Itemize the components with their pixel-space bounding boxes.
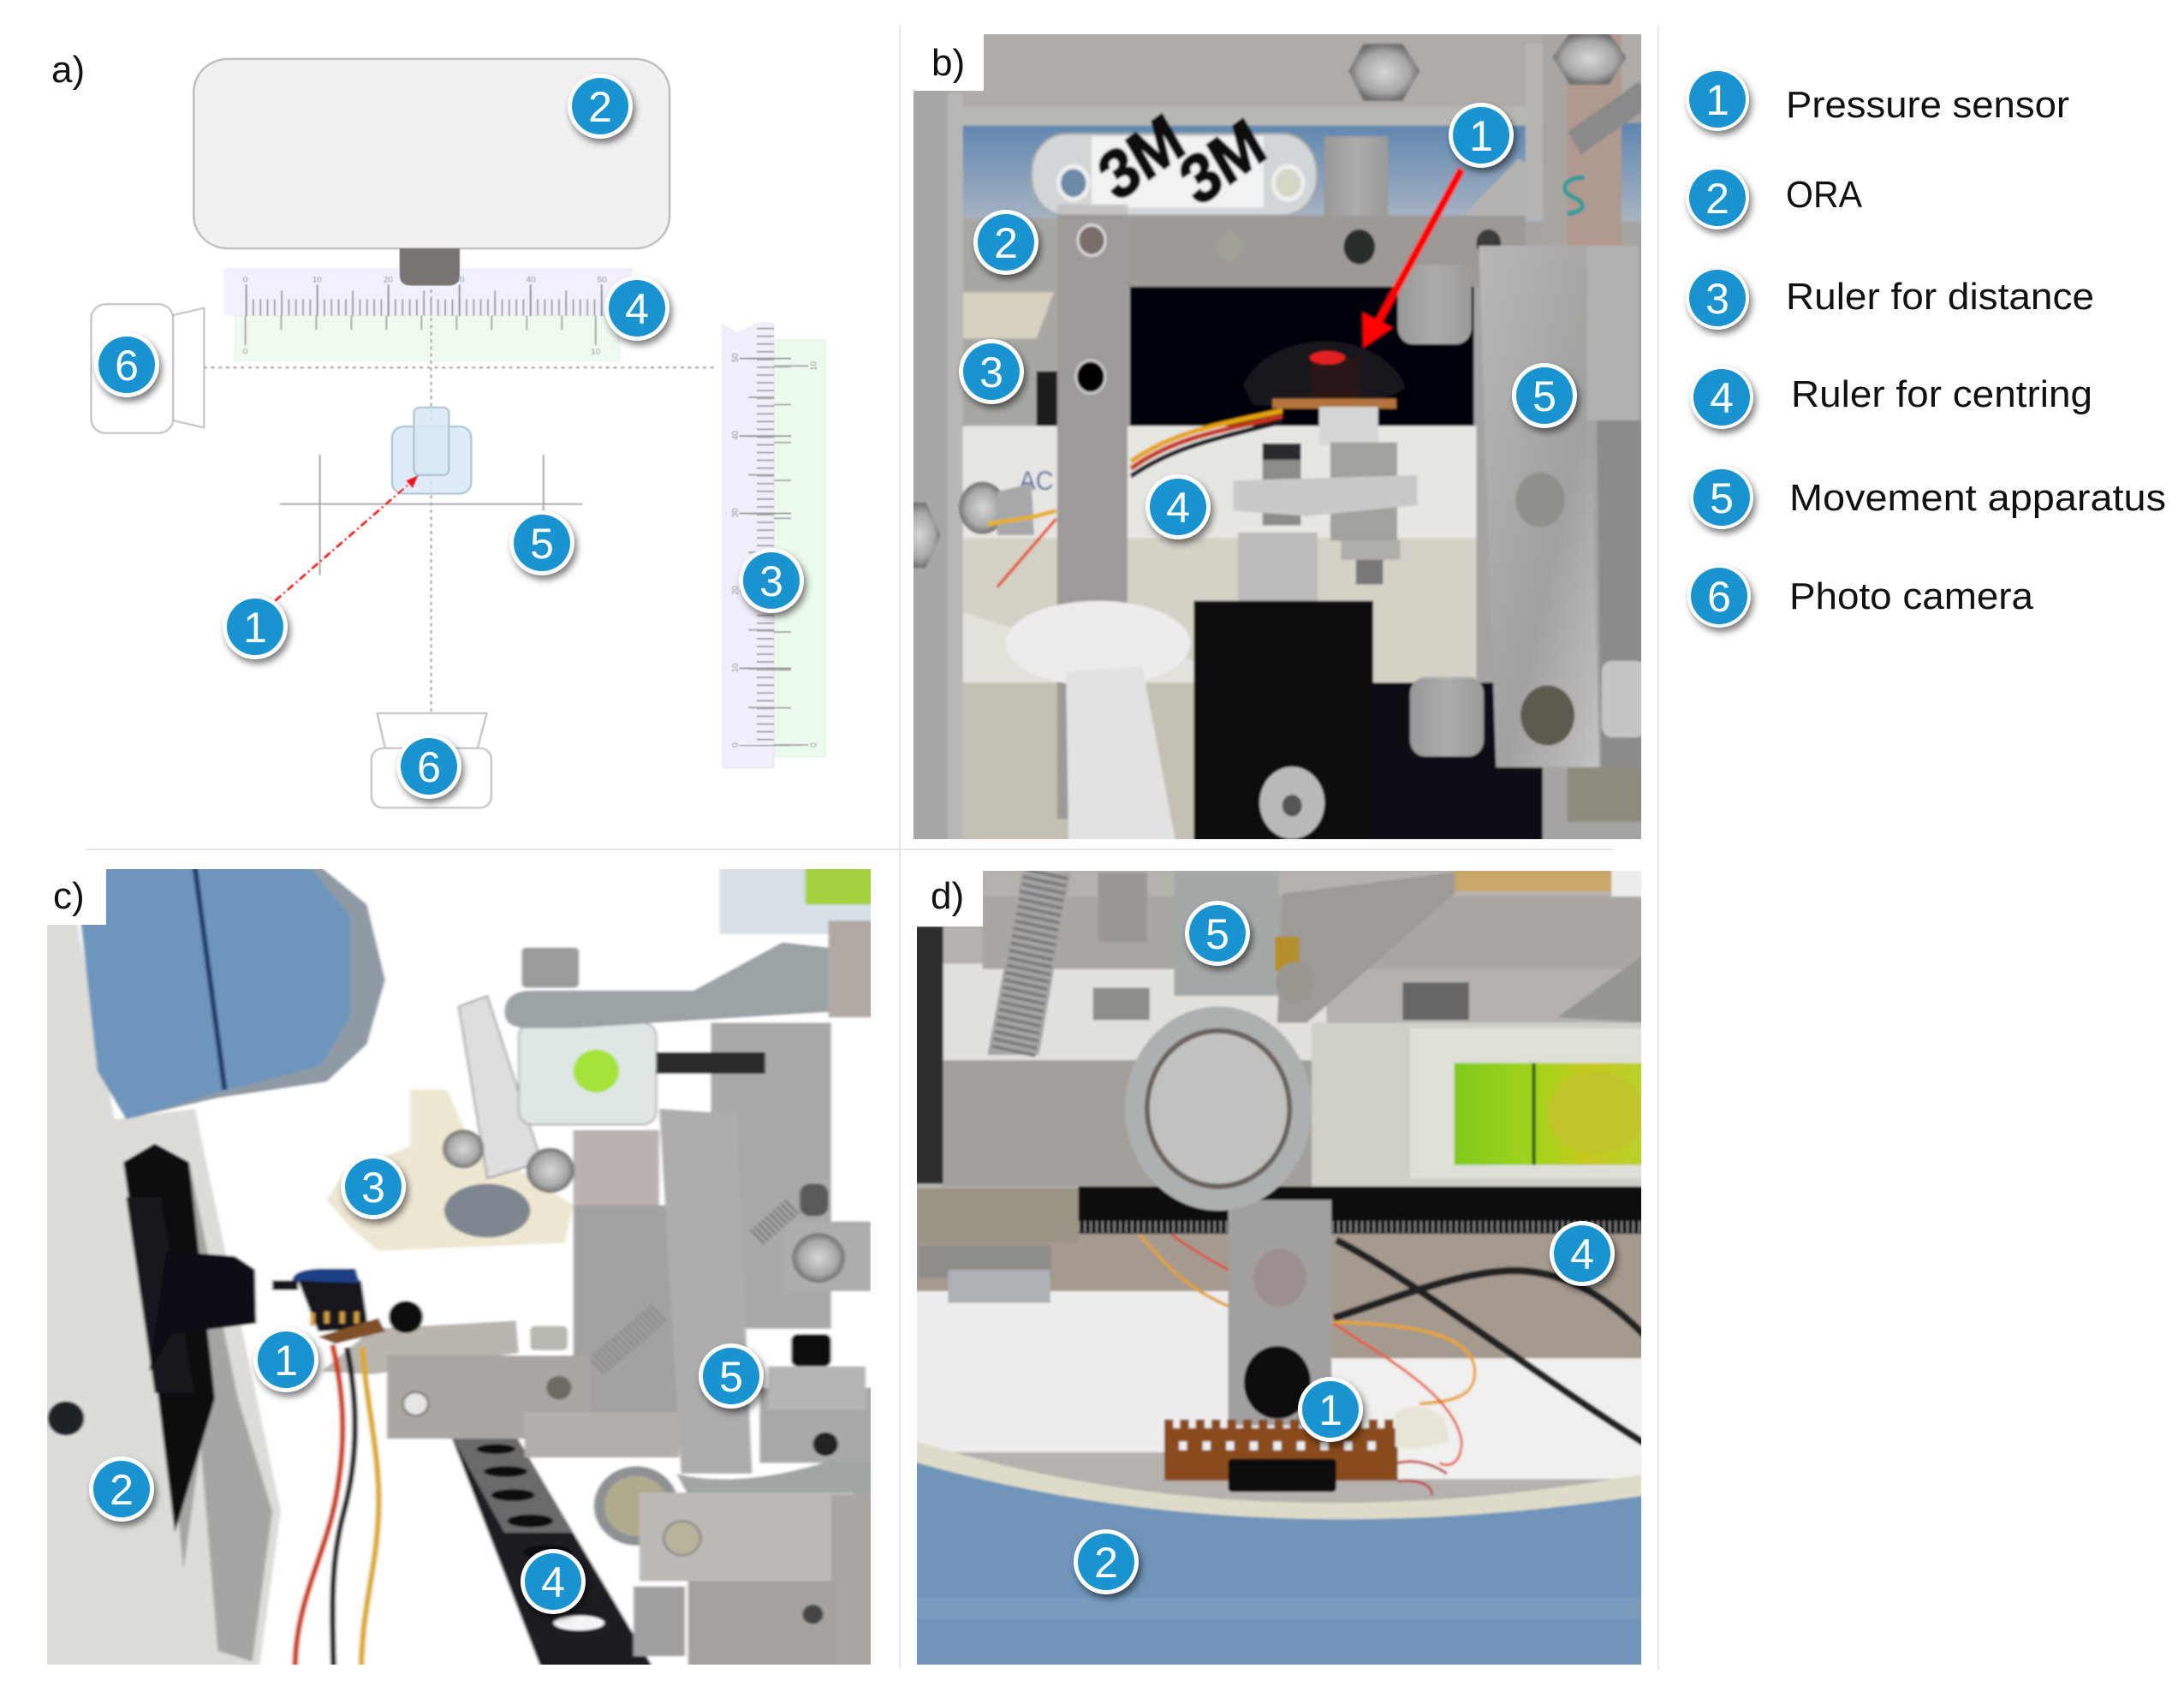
panel: d) close-up photograph [908, 861, 1651, 1672]
badge 4 [521, 1549, 586, 1614]
badge 3: 3 [979, 349, 1003, 396]
legend item 6: Photo camera [1687, 564, 2034, 628]
panel label a): a) [51, 49, 85, 91]
badge 5: 5 [530, 520, 554, 568]
badge 1: 1 [274, 1337, 298, 1385]
badge 4: 4 [625, 285, 649, 333]
legend item 4: Ruler for centring: Ruler for centring [1791, 373, 2092, 415]
badge 4: 4 [541, 1558, 565, 1606]
ruler for centring: 0 [243, 347, 248, 356]
legend item 6: Photo camera: Photo camera [1789, 575, 2034, 617]
ruler for distance: 30 [731, 508, 741, 517]
dashed alignment lines [92, 289, 714, 808]
legend item 5: Movement apparatus: 5 [1710, 474, 1734, 522]
ruler for distance: 0 [731, 742, 741, 748]
panel label b) [913, 34, 984, 91]
ruler for centring: 20 [384, 276, 393, 285]
legend item 1: Pressure sensor [1686, 68, 2069, 131]
ruler for distance: 10 [731, 663, 741, 672]
ORA device body [193, 59, 669, 248]
badge 3: 3 [361, 1164, 385, 1212]
badge 2: 2 [994, 219, 1018, 267]
badge 5: 5 [1205, 910, 1229, 958]
pressure sensor [392, 408, 471, 494]
legend item 3: Ruler for distance: 3 [1705, 275, 1729, 323]
badge 1: 1 [1318, 1386, 1342, 1434]
left photo camera [91, 304, 204, 433]
badge 1: 1 [1469, 112, 1493, 160]
badge 4 [1146, 474, 1211, 539]
legend item 5: Movement apparatus [1690, 466, 2166, 529]
badge 3 [739, 548, 804, 613]
ruler for distance: 40 [731, 430, 741, 440]
ruler for centring [223, 268, 634, 361]
ruler for centring: 0 [243, 276, 248, 285]
legend item 1: Pressure sensor: 1 [1705, 76, 1729, 124]
badge 4: 4 [1166, 484, 1190, 532]
ruler for centring: 40 [526, 276, 536, 285]
legend [1686, 68, 2166, 628]
legend item 5: Movement apparatus: Movement apparatus [1789, 477, 2166, 519]
badge 3: 3 [759, 557, 783, 605]
panel label c): c) [53, 875, 85, 917]
panel: b) front view photograph: 3M [1086, 100, 1196, 216]
movement apparatus [280, 455, 582, 575]
ruler for distance: 20 [731, 586, 741, 595]
badge 1 [1298, 1377, 1363, 1442]
legend item 3: Ruler for distance [1686, 266, 2094, 330]
bottom photo camera [372, 713, 491, 807]
panel label d) [917, 871, 983, 926]
number badges: panel a [94, 74, 804, 799]
badge 5: 5 [1532, 372, 1556, 420]
legend item 1: Pressure sensor: Pressure sensor [1786, 84, 2069, 126]
badge 5 [699, 1344, 764, 1409]
divider lines [86, 26, 1658, 1670]
badge 2: 2 [110, 1466, 134, 1514]
badge 1: 1 [243, 604, 267, 652]
panel: a) schematic diagram [51, 49, 825, 808]
panel label b): b) [931, 42, 965, 84]
badge 2 [89, 1457, 154, 1522]
legend item 3: Ruler for distance: Ruler for distance [1786, 276, 2094, 318]
badge 5 [1185, 901, 1250, 966]
badge 2 [1074, 1529, 1139, 1594]
number badges: panel d [1074, 901, 1615, 1594]
badge 6 bottom: 6 [417, 743, 441, 791]
ruler for centring: 50 [597, 276, 607, 285]
badge 3 [341, 1154, 406, 1219]
legend item 2: ORA: ORA [1786, 174, 1863, 216]
badge 3 [959, 339, 1024, 404]
badge 1 [253, 1327, 318, 1392]
legend item 6: Photo camera: 6 [1707, 573, 1731, 621]
badge 1 [1449, 103, 1514, 168]
red pointer arrow [275, 475, 419, 601]
ruler for distance: 10 [809, 360, 819, 371]
badge 6 bottom [396, 734, 461, 799]
badge 2 [973, 210, 1038, 275]
badge 2: 2 [588, 83, 612, 131]
badge 4 [604, 276, 669, 341]
ruler for distance: 50 [731, 353, 741, 362]
ruler for centring: 30 [455, 276, 465, 285]
panel: c) side view photograph [34, 861, 889, 1677]
badge 6 left: 6 [115, 342, 139, 390]
badge 4 [1550, 1221, 1615, 1286]
ORA nozzle [400, 248, 460, 286]
panel: b) front view photograph [899, 16, 1665, 852]
ruler for distance [723, 322, 825, 768]
panel: b) front view photograph: AC [1020, 467, 1053, 496]
panel: b) front view photograph: 3M [1168, 104, 1277, 220]
legend item 2: ORA: 2 [1705, 175, 1729, 223]
panel label c) [47, 869, 106, 925]
legend item 4: Ruler for centring: 4 [1710, 374, 1734, 422]
number badges: panel b [959, 103, 1577, 539]
badge 5: 5 [719, 1353, 743, 1401]
badge 2 [568, 74, 633, 139]
badge 5 [1512, 363, 1577, 428]
number badges: panel c [89, 1154, 764, 1614]
badge 4: 4 [1570, 1230, 1594, 1278]
legend item 4: Ruler for centring [1690, 366, 2092, 429]
ruler for centring: 10 [591, 347, 601, 356]
badge 6 left [94, 332, 159, 397]
badge 5 [509, 510, 574, 575]
ruler for distance: 0 [809, 742, 819, 748]
panel label d): d) [931, 875, 964, 917]
ruler for centring: 10 [312, 276, 322, 285]
legend item 2: ORA [1686, 166, 1863, 229]
badge 1 [223, 594, 288, 659]
badge 2: 2 [1094, 1539, 1118, 1587]
